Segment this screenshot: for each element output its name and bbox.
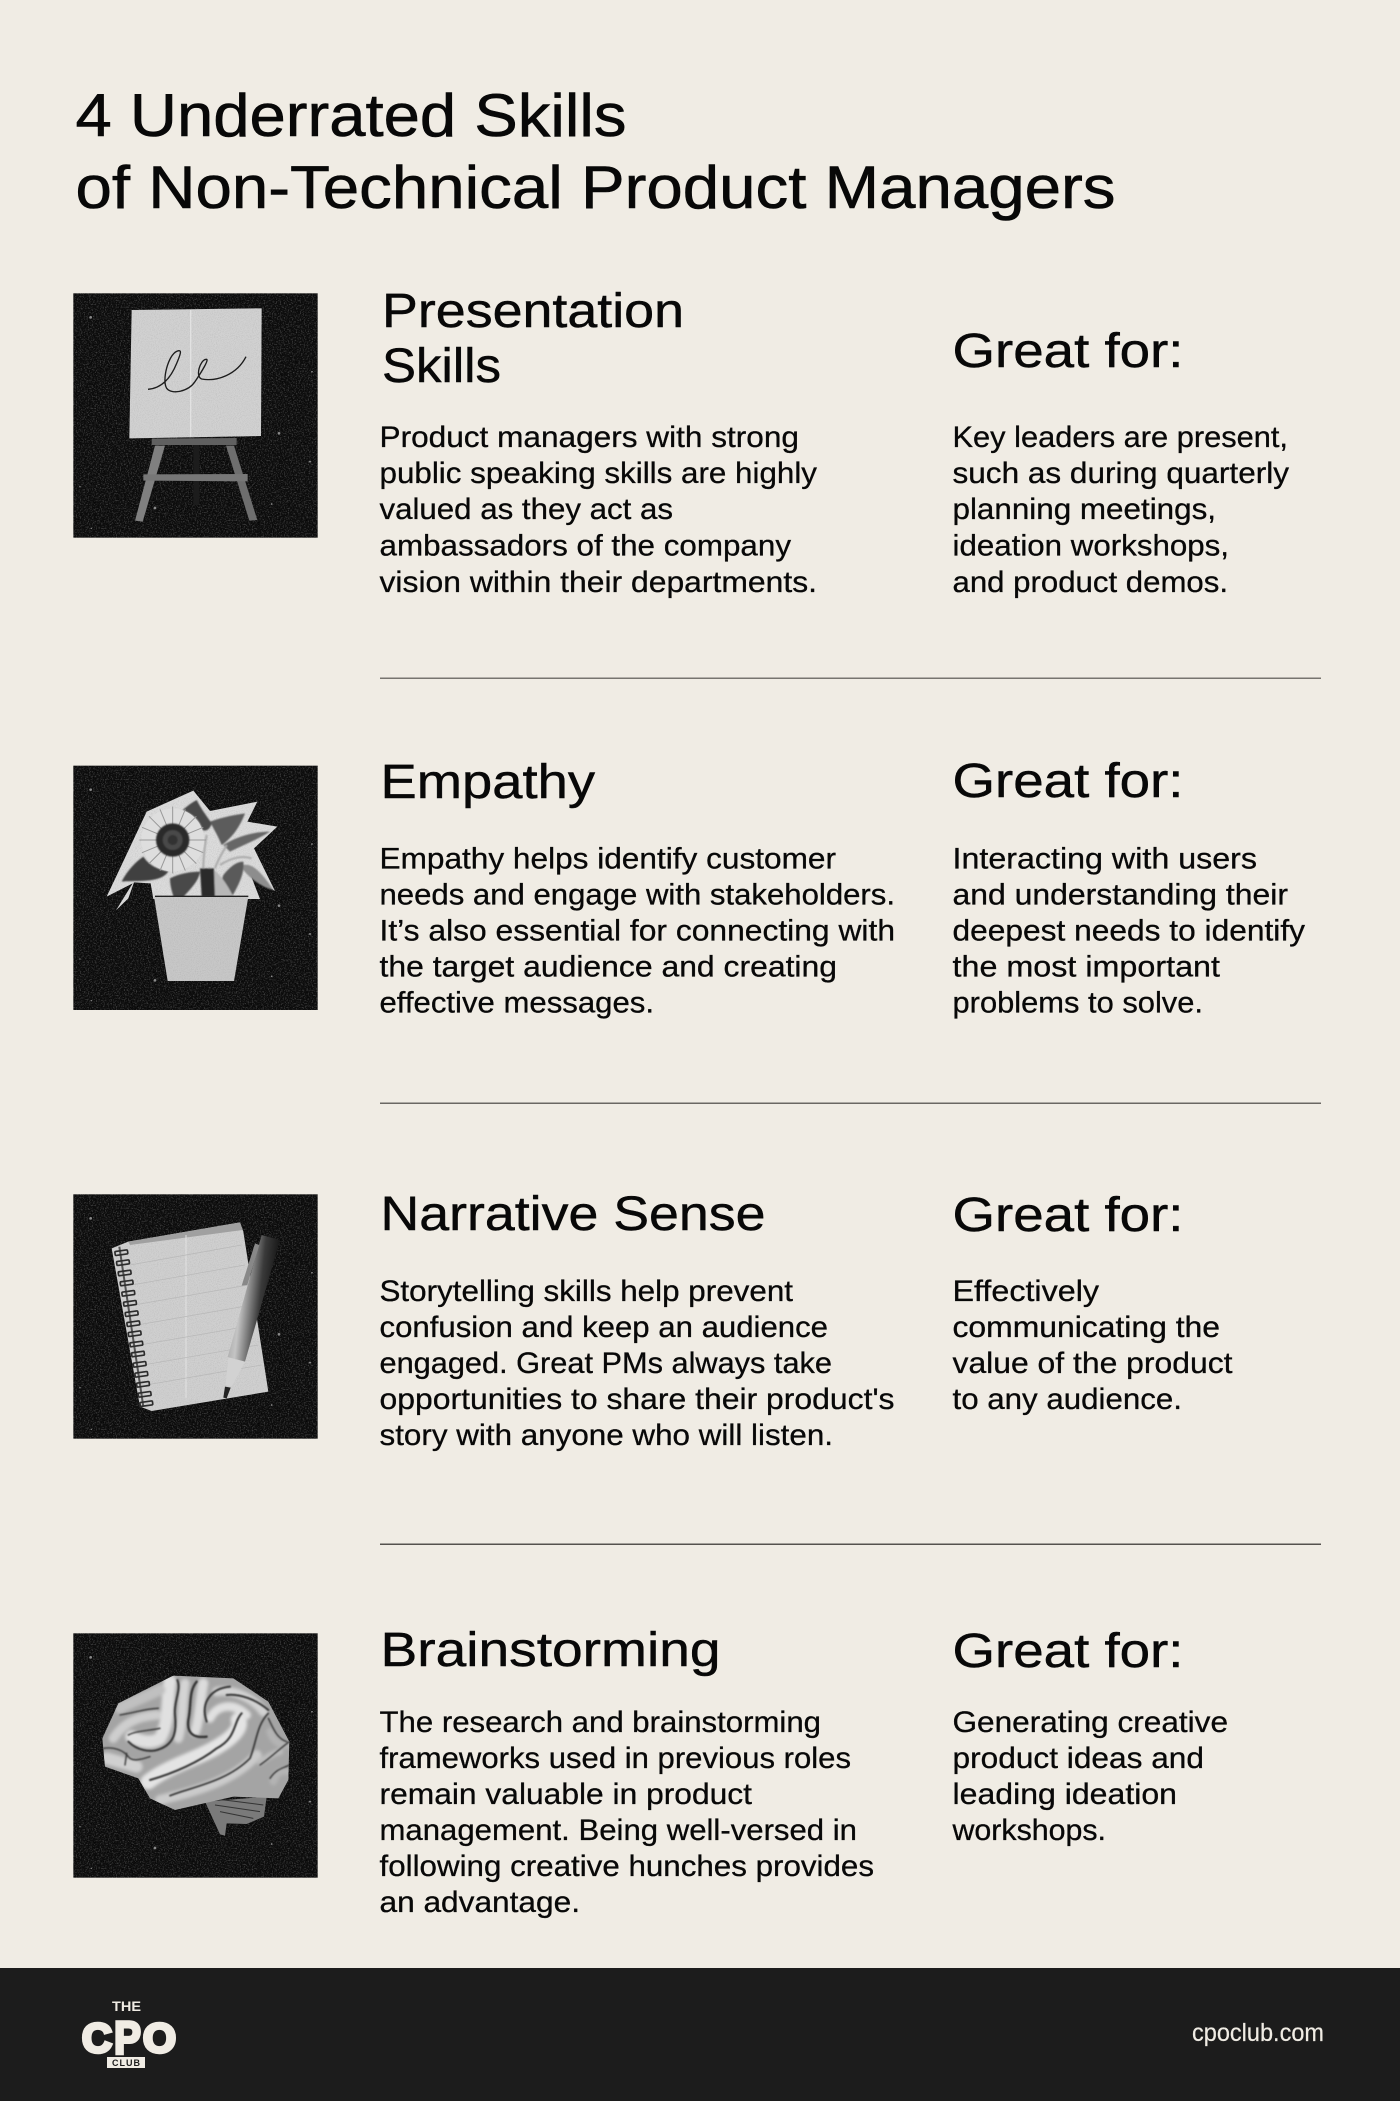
body text: brainstorming: remain valuable in product: [380, 1778, 753, 1811]
body text: brainstorming: frameworks used in previous roles: [380, 1742, 851, 1775]
great for text: presentation skills: [952, 421, 1289, 599]
subheading: great for: Great for:: [952, 325, 1184, 378]
great for text: narrative sense: [952, 1275, 1233, 1416]
heading: brainstorming: Brainstorming: [380, 1624, 720, 1677]
body text: narrative sense: [380, 1275, 894, 1452]
body text: narrative sense: Storytelling skills help prevent: [380, 1275, 794, 1308]
body text: presentation skills: public speaking skills are highly: [380, 457, 817, 490]
heading: presentation skills: Skills: [382, 340, 501, 393]
great for text: presentation skills: and product demos.: [952, 566, 1228, 599]
logo: the cpo club: P: [114, 2012, 141, 2064]
title: of Non-Technical Product Managers: [76, 154, 1116, 221]
icon: easel with paper: [73, 293, 318, 538]
heading: presentation skills: Presentation: [382, 285, 684, 338]
body text: narrative sense: story with anyone who will listen.: [380, 1419, 833, 1452]
great for text: brainstorming: workshops.: [951, 1814, 1106, 1847]
body text: brainstorming: The research and brainstorming: [380, 1706, 821, 1739]
subheading: great for: Great for:: [952, 1625, 1184, 1678]
body text: presentation skills: valued as they act as: [380, 493, 673, 526]
great for text: empathy: the most important: [952, 950, 1221, 984]
great for text: empathy: problems to solve.: [952, 986, 1203, 1020]
logo: the cpo club: [82, 1998, 176, 2068]
body text: empathy: needs and engage with stakeholders.: [380, 878, 895, 912]
footer band: [0, 1968, 1400, 2101]
body text: presentation skills: vision within their departments.: [380, 566, 817, 599]
great for text: presentation skills: such as during quarterly: [952, 457, 1289, 490]
body text: narrative sense: engaged. Great PMs always take: [380, 1347, 832, 1380]
panel: presentation skills: [73, 285, 1289, 599]
icon: spiral notebook and pen: [73, 1194, 318, 1439]
great for text: narrative sense: Effectively: [952, 1275, 1099, 1308]
heading: narrative sense: Narrative Sense: [380, 1188, 766, 1241]
body text: narrative sense: confusion and keep an audience: [380, 1311, 828, 1344]
body text: empathy: [380, 842, 895, 1020]
body text: presentation skills: [380, 421, 817, 599]
title: [76, 82, 1116, 221]
great for text: presentation skills: planning meetings,: [952, 493, 1216, 526]
great for text: presentation skills: ideation workshops,: [952, 530, 1229, 562]
body text: presentation skills: ambassadors of the company: [380, 530, 791, 562]
great for text: empathy: [952, 842, 1305, 1020]
body text: empathy: Empathy helps identify customer: [380, 842, 836, 876]
body text: brainstorming: [380, 1706, 874, 1919]
body text: brainstorming: following creative hunches provides: [380, 1850, 874, 1883]
great for text: narrative sense: communicating the: [952, 1311, 1220, 1344]
great for text: narrative sense: value of the product: [952, 1347, 1233, 1380]
body text: empathy: the target audience and creating: [380, 950, 837, 984]
subheading: great for: Great for:: [952, 755, 1184, 808]
great for text: narrative sense: to any audience.: [952, 1383, 1182, 1416]
panel: brainstorming: [73, 1624, 1228, 1919]
great for text: brainstorming: [951, 1706, 1228, 1847]
great for text: empathy: and understanding their: [952, 878, 1288, 912]
logo: the cpo club: THE: [112, 1998, 141, 2014]
body text: brainstorming: an advantage.: [380, 1886, 580, 1919]
heading: empathy: Empathy: [380, 756, 595, 809]
icon: brain: [73, 1633, 318, 1878]
logo: the cpo club: C: [82, 2015, 112, 2061]
great for text: empathy: deepest needs to identify: [952, 914, 1305, 948]
body text: brainstorming: management. Being well-versed in: [380, 1814, 857, 1847]
panel: empathy: [73, 755, 1305, 1020]
great for text: brainstorming: product ideas and: [952, 1742, 1204, 1775]
great for text: presentation skills: Key leaders are present,: [952, 421, 1288, 454]
great for text: empathy: Interacting with users: [952, 842, 1257, 876]
great for text: brainstorming: leading ideation: [952, 1778, 1177, 1811]
heading: presentation skills: [382, 285, 684, 393]
panel: narrative sense: [73, 1188, 1233, 1452]
body text: empathy: effective messages.: [380, 986, 654, 1020]
great for text: brainstorming: Generating creative: [952, 1706, 1228, 1739]
website url: cpoclub.com: [1192, 2019, 1324, 2047]
body text: narrative sense: opportunities to share their product's: [380, 1383, 894, 1416]
body text: presentation skills: Product managers with strong: [380, 421, 799, 454]
title: 4 Underrated Skills: [76, 82, 626, 149]
body text: empathy: It’s also essential for connecting with: [380, 914, 895, 948]
logo: the cpo club: O: [143, 2015, 176, 2061]
icon: sunflower in pot: [73, 766, 318, 1010]
logo: the cpo club: CLUB: [112, 2058, 140, 2068]
subheading: great for: Great for:: [952, 1189, 1184, 1242]
